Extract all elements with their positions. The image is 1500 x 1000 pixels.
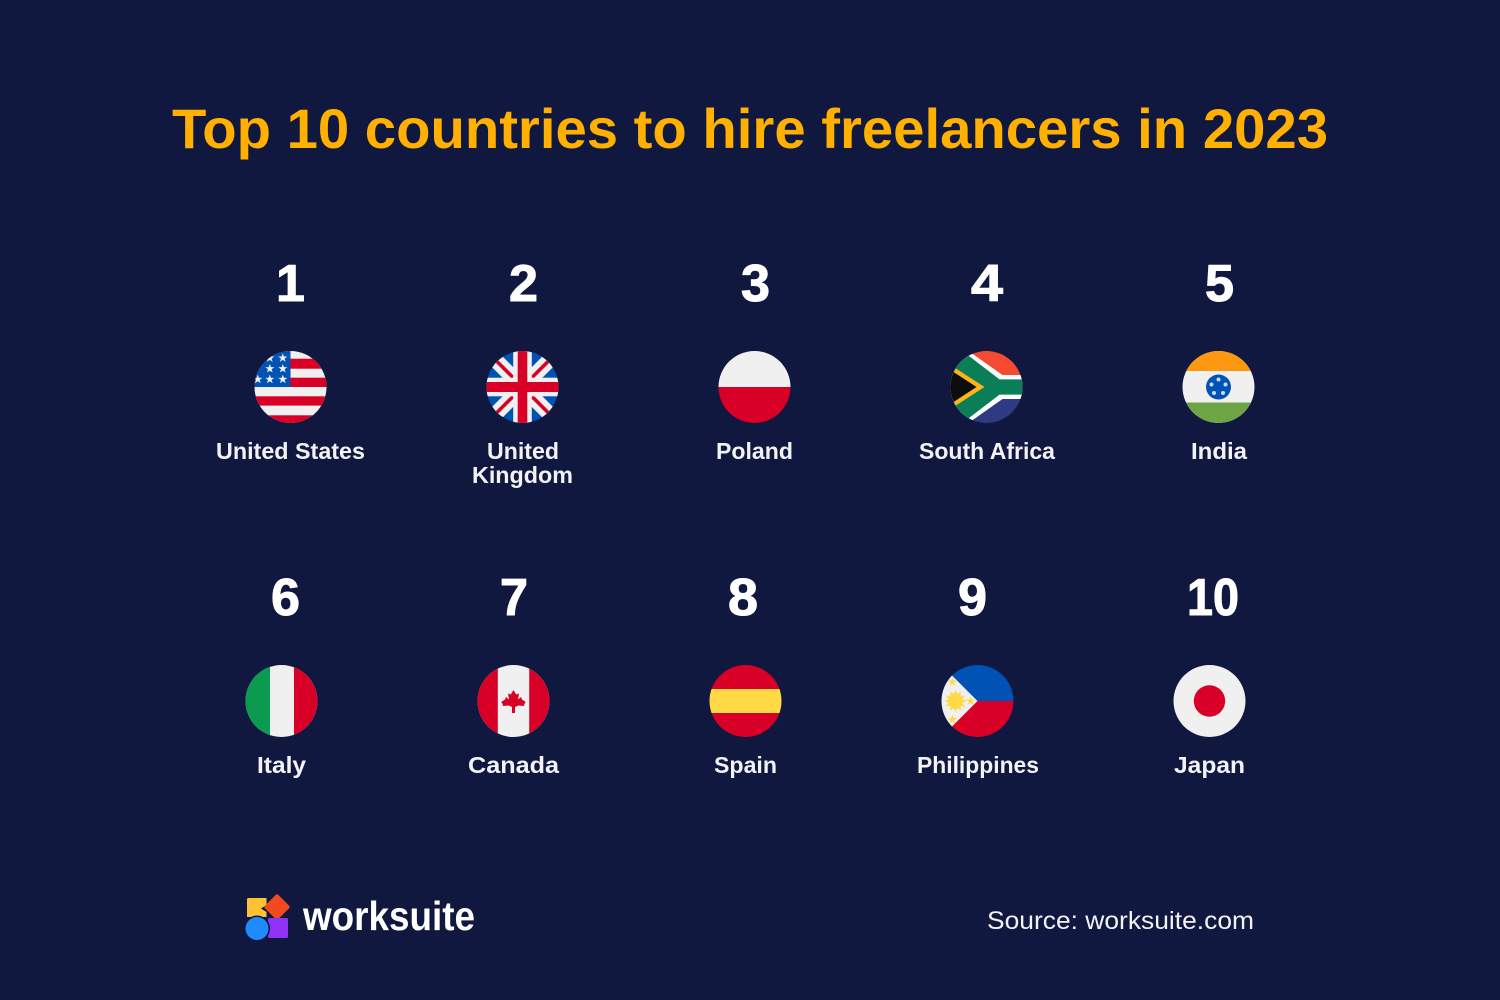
icon: flag of Italy <box>246 665 318 737</box>
icon: flag of Spain <box>710 665 782 737</box>
label: United <box>487 438 559 464</box>
title: Top 10 countries to hire freelancers in 2023 <box>172 97 1328 160</box>
number 2: 2 <box>509 255 538 313</box>
label: Japan <box>1174 752 1245 778</box>
icon: flag of Japan <box>1174 665 1246 737</box>
wordmark: worksuite <box>302 893 475 939</box>
label: South Africa <box>919 438 1055 464</box>
number 10: 10 <box>1187 569 1239 627</box>
label: Philippines <box>917 752 1039 778</box>
number 9: 9 <box>958 569 987 627</box>
icon: flag of Poland <box>718 351 790 423</box>
number 4: 4 <box>971 255 1003 313</box>
number 7: 7 <box>500 569 528 627</box>
panel: rank 4 South Africa <box>919 255 1055 464</box>
label: Italy <box>257 752 306 778</box>
icon: flag of South Africa <box>950 351 1022 423</box>
label: Spain <box>714 752 777 778</box>
panel: rank 1 United States <box>216 255 365 464</box>
number 5: 5 <box>1205 255 1234 313</box>
icon: flag of United States <box>253 351 326 423</box>
panel: rank 5 India <box>1182 255 1254 464</box>
panel: rank 6 Italy <box>246 569 318 778</box>
panel: rank 7 Canada <box>468 569 559 778</box>
label: United States <box>216 438 365 464</box>
label second line: Kingdom <box>472 462 573 488</box>
icon: flag of Philippines <box>942 665 1014 737</box>
panel: rank 9 Philippines <box>917 569 1039 778</box>
number 8: 8 <box>728 569 758 627</box>
label: Canada <box>468 752 559 778</box>
label: India <box>1191 438 1247 464</box>
number 3: 3 <box>741 255 770 313</box>
source note: Source: worksuite.com <box>987 907 1254 935</box>
icon: flag of India <box>1182 351 1254 423</box>
logo: worksuite <box>244 893 475 942</box>
panel: rank 2 United Kingdom <box>472 255 573 488</box>
number 6: 6 <box>271 569 300 627</box>
panel: rank 8 Spain <box>710 569 782 778</box>
number 1: 1 <box>276 255 305 313</box>
panel: rank 3 Poland <box>718 264 792 459</box>
icon: flag of United Kingdom <box>486 351 558 423</box>
icon: flag of Canada <box>478 665 550 737</box>
icon: worksuite mark <box>244 894 290 942</box>
label: Poland <box>716 438 793 464</box>
panel: rank 10 Japan <box>1174 569 1246 778</box>
